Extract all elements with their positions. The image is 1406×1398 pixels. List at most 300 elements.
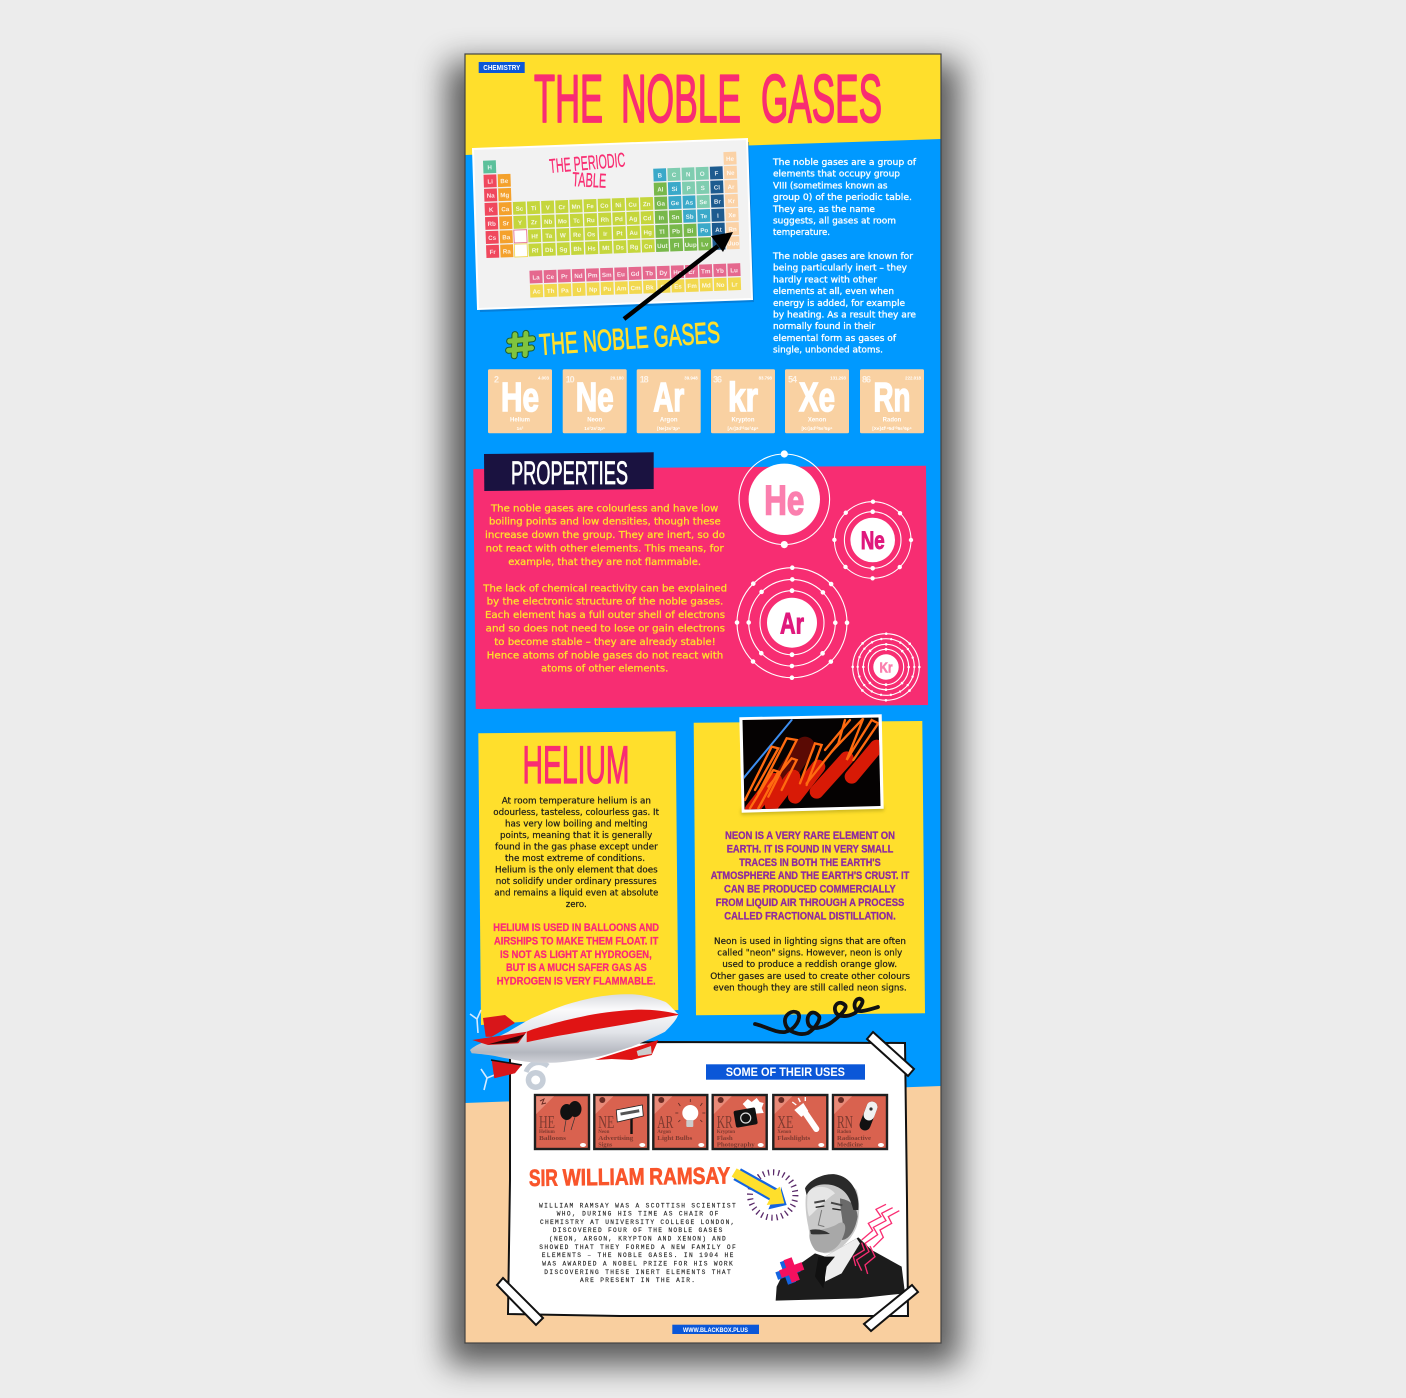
periodic table grid: Db [545, 247, 554, 254]
periodic table grid: He [726, 156, 735, 163]
panel: periodic table card [473, 139, 754, 312]
periodic table grid: Si [671, 186, 678, 193]
ramsay heading: RAMSAY [649, 1163, 731, 1189]
element: radon: Rn [874, 374, 910, 420]
periodic table grid: Nd [574, 273, 583, 280]
helium description [493, 796, 660, 910]
tape: top right [867, 1032, 914, 1076]
element: neon: 1s²2s²2p⁶ [584, 426, 605, 431]
periodic table grid: Co [600, 203, 609, 210]
periodic table grid: Ge [671, 200, 680, 207]
periodic table grid: Fm [687, 283, 697, 290]
periodic table grid: Se [699, 199, 708, 206]
helium uses callout: AIRSHIPS TO MAKE THEM FLOAT. IT [494, 935, 659, 947]
neon facts callout: EARTH. IT IS FOUND IN VERY SMALL [727, 843, 894, 855]
periodic table grid: Mt [602, 245, 610, 252]
periodic table grid: Ga [657, 200, 666, 208]
tile: argon light bulbs: AR [657, 1112, 673, 1132]
tile: helium balloons: Balloons [539, 1136, 567, 1142]
periodic table grid: Tb [645, 270, 653, 278]
ramsay biography: WILLIAM RAMSAY WAS A SCOTTISH SCIENTIST [539, 1202, 736, 1209]
periodic table grid: Ba [502, 234, 511, 242]
tile: radon radioactive medicine: Medicine [837, 1142, 863, 1148]
periodic table grid: Sn [671, 214, 680, 221]
periodic table grid: Tc [573, 218, 581, 225]
element: argon: 39.948 [684, 375, 698, 380]
neon description [710, 937, 910, 993]
periodic table grid [483, 152, 741, 299]
tile: helium balloons: Helium [539, 1130, 556, 1135]
properties text: The noble gases are colourless and have low [490, 503, 718, 514]
helium description: the most extreme of conditions. [505, 854, 645, 864]
tile: krypton flash photography: Photography [717, 1142, 755, 1148]
periodic table grid: Tl [659, 229, 665, 236]
periodic table grid: I [717, 213, 719, 220]
tape: bottom left [497, 1278, 543, 1325]
tile: neon signs: Signs [598, 1142, 613, 1148]
tile: radon radioactive medicine: Radioactive [837, 1136, 871, 1142]
periodic table grid: U [577, 287, 582, 294]
periodic table grid: Po [700, 227, 709, 234]
icon: sunburst with arrow [732, 1168, 795, 1218]
atom: helium [739, 450, 830, 548]
helium description: has very low boiling and melting [505, 819, 648, 829]
atom: neon: Ne [861, 527, 885, 555]
periodic table grid: S [701, 185, 705, 192]
intro text: hardly react with other [773, 275, 877, 285]
tile: argon light bulbs: Argon [657, 1130, 671, 1135]
element: helium: He [501, 374, 539, 420]
periodic table grid: Mg [500, 192, 510, 199]
periodic table grid: Te [700, 213, 708, 220]
periodic table grid: Be [500, 178, 509, 185]
periodic table grid: Uut [657, 243, 668, 250]
properties text: Each element has a full outer shell of electrons [485, 610, 725, 621]
periodic table grid: No [716, 282, 725, 289]
periodic table grid: Fr [489, 249, 496, 256]
periodic table heading [549, 149, 626, 193]
periodic table grid: Am [616, 285, 627, 293]
tile: xenon flashlights: XE [777, 1112, 793, 1132]
panel: helium [478, 731, 678, 1025]
periodic table grid: Dy [659, 270, 668, 277]
tile: xenon flashlights [773, 1095, 827, 1149]
intro text: VIII (sometimes known as [773, 181, 888, 191]
portrait: William Ramsay [776, 1174, 905, 1301]
periodic table grid: Hf [531, 233, 539, 241]
intro text: energy is added, for example [773, 299, 905, 309]
helium uses callout: HYDROGEN IS VERY FLAMMABLE. [497, 976, 656, 988]
periodic table grid: Cl [714, 184, 720, 192]
periodic table grid: Pt [616, 230, 623, 237]
ramsay biography: ARE PRESENT IN THE AIR. [580, 1277, 695, 1284]
element: radon: 86 [862, 374, 871, 384]
panel: neon [694, 714, 925, 1015]
periodic table grid: Cs [488, 235, 497, 242]
periodic table grid: Cm [630, 285, 641, 292]
helium description: and remains a liquid even at absolute [494, 888, 658, 898]
periodic table grid: Ne [726, 170, 735, 177]
element: krypton: Krypton [732, 417, 755, 423]
element: krypton: 83.798 [759, 375, 773, 380]
ramsay biography: ELEMENTS – THE NOBLE GASES. IN 1904 HE [542, 1252, 734, 1259]
neon description: called "neon" signs. However, neon is only [717, 949, 902, 959]
element cards [488, 369, 924, 433]
periodic table grid: Cr [558, 204, 566, 211]
helium heading: HELIUM [522, 736, 630, 795]
ramsay biography: WHO, DURING HIS TIME AS CHAIR OF [557, 1211, 719, 1218]
periodic table grid: Rn [728, 226, 737, 233]
periodic table heading: THE PERIODIC [549, 149, 626, 178]
properties heading: PROPERTIES [511, 455, 628, 491]
periodic table grid: Lu [730, 267, 738, 275]
element: argon [637, 369, 701, 433]
periodic table grid: W [560, 232, 566, 239]
neon facts callout: FROM LIQUID AIR THROUGH A PROCESS [716, 897, 904, 909]
periodic table grid: Br [714, 198, 722, 206]
intro text: normally found in their [773, 322, 875, 332]
periodic table grid: Th [547, 288, 555, 295]
tile: krypton flash photography [713, 1095, 767, 1149]
ramsay heading [529, 1163, 731, 1191]
properties text: and so does not need to lose or gain electrons [486, 624, 725, 634]
periodic table grid: Os [587, 231, 596, 239]
periodic table grid: Sr [502, 220, 510, 227]
title [534, 61, 882, 137]
tile: neon signs: Advertising [598, 1136, 633, 1142]
ramsay biography: WAS AWARDED A NOBEL PRIZE FOR HIS WORK [542, 1260, 733, 1268]
atom: helium: He [764, 476, 804, 524]
atom: krypton [853, 634, 919, 700]
tile: argon light bulbs [653, 1095, 707, 1149]
periodic table grid: Md [702, 282, 711, 290]
icon: pink cross [773, 1255, 807, 1287]
periodic table grid: Ra [503, 248, 511, 256]
atom: argon: Ar [780, 608, 804, 640]
helium uses callout: BUT IS A MUCH SAFER GAS AS [506, 962, 647, 974]
element: neon: Neon [587, 417, 603, 423]
periodic table grid: Au [629, 230, 638, 237]
periodic table grid: Cd [643, 215, 652, 222]
footer url: WWW.BLACKBOX.PLUS [683, 1328, 748, 1334]
element: helium: Helium [510, 417, 530, 423]
periodic table grid: Es [674, 283, 682, 291]
element: argon: Ar [653, 374, 684, 420]
periodic table grid: Lr [731, 281, 738, 289]
icon: green hash [507, 333, 534, 356]
periodic table grid: Lv [701, 241, 709, 249]
periodic table grid: Eu [617, 271, 625, 279]
properties text: boiling points and low densities, though these [489, 517, 721, 528]
ramsay heading: SIR [529, 1165, 558, 1191]
intro text [772, 158, 917, 356]
element: xenon: 54 [788, 374, 797, 384]
helium description: found in the gas phase except under [495, 842, 658, 852]
atom: krypton: Kr [880, 660, 893, 676]
element: krypton: 36 [713, 374, 722, 384]
periodic table grid: Bi [687, 228, 694, 235]
element: helium: 2 [494, 374, 499, 384]
periodic table grid: Pm [588, 272, 598, 280]
ramsay biography: (NEON, ARGON, KRYPTON AND XENON) AND [549, 1236, 726, 1243]
periodic table grid: Pu [603, 286, 612, 293]
uses heading [706, 1064, 865, 1080]
element: xenon: 131.293 [830, 375, 847, 380]
helium uses callout: IS NOT AS LIGHT AT HYDROGEN, [500, 949, 652, 961]
periodic table grid: Sm [602, 272, 612, 279]
tile: radon radioactive medicine [833, 1095, 887, 1149]
intro text: by heating. As a result they are [773, 310, 916, 320]
periodic table grid: Sb [686, 214, 694, 221]
title: GASES [761, 61, 882, 137]
ramsay biography [539, 1202, 736, 1284]
footer url [672, 1325, 759, 1334]
periodic table grid: O [700, 171, 705, 178]
periodic table grid: Mn [571, 204, 581, 211]
tile: argon light bulbs: Light Bulbs [657, 1136, 693, 1142]
poster background [465, 54, 941, 1343]
ramsay biography: DISCOVERING THESE INERT ELEMENTS THAT [544, 1269, 731, 1276]
intro text: elements that occupy group [773, 170, 900, 180]
title: NOBLE [621, 61, 741, 137]
intro text: group 0) of the periodic table. [773, 193, 912, 203]
properties text: not react with other elements. This means, for [486, 544, 725, 554]
helium description: odourless, tasteless, colourless gas. It [493, 808, 660, 818]
periodic table grid: Cu [628, 202, 637, 209]
periodic table grid: Sc [516, 206, 524, 213]
periodic table grid: K [489, 207, 494, 214]
periodic table grid: P [686, 185, 691, 193]
element: radon: Radon [883, 417, 902, 423]
tile: krypton flash photography: KR [717, 1112, 733, 1132]
periodic table grid: Rh [601, 217, 609, 224]
properties text: Hence atoms of noble gases do not react with [487, 650, 723, 661]
periodic table grid: Zn [643, 201, 651, 208]
periodic table grid: Bk [646, 284, 654, 292]
periodic table grid: Uuo [727, 240, 739, 248]
element: argon: 18 [640, 374, 649, 384]
category tag: CHEMISTRY [483, 65, 521, 72]
ramsay biography: SHOWED THAT THEY FORMED A NEW FAMILY OF [539, 1244, 736, 1251]
atom: neon [834, 502, 911, 578]
tile: neon signs [594, 1095, 648, 1149]
periodic table grid: Pr [561, 273, 568, 281]
periodic table grid: Np [589, 286, 598, 294]
tile: krypton flash photography: Flash [717, 1136, 733, 1142]
element: xenon: Xenon [808, 417, 826, 423]
tile: radon radioactive medicine: RN [837, 1112, 853, 1132]
periodic table grid: H [487, 164, 493, 172]
intro text: The noble gases are known for [772, 252, 913, 262]
tile: radon radioactive medicine: Radon [837, 1130, 851, 1135]
periodic table grid: Fl [674, 242, 680, 250]
periodic table grid: Kr [728, 198, 736, 205]
element: neon: 20.180 [610, 375, 624, 380]
properties text: increase down the group. They are inert, so do [485, 530, 725, 541]
periodic table grid: At [715, 227, 722, 234]
squiggle [755, 999, 878, 1034]
periodic table grid: Ir [603, 231, 608, 238]
element: neon: 10 [566, 374, 575, 384]
infographic page [423, 38, 983, 1389]
helium uses callout [493, 922, 659, 988]
intro text: They are, as the name [772, 205, 875, 215]
neon description: even though they are still called neon signs. [713, 983, 907, 993]
title: THE [534, 61, 603, 137]
element: helium: 1s² [517, 426, 524, 431]
periodic table grid: Hs [588, 245, 596, 253]
periodic table heading: TABLE [572, 169, 607, 193]
intro text: elements at all, even when [773, 287, 894, 297]
periodic table grid: Li [487, 178, 493, 186]
element: helium: 4.003 [538, 375, 550, 380]
icon: pink zigzags [853, 1204, 899, 1274]
tile: helium balloons: HE [539, 1112, 555, 1132]
element: argon: Argon [660, 417, 678, 423]
illustration: airship [470, 994, 678, 1090]
periodic table grid: Rb [487, 221, 496, 228]
periodic table grid: Gd [631, 271, 640, 278]
helium description: not solidify under ordinary pressures [496, 877, 657, 887]
element: argon: [Ne]3s²3p⁶ [657, 426, 680, 431]
intro text: single, unbonded atoms. [773, 346, 883, 356]
panel: uses and biography card [497, 1032, 918, 1331]
element: helium [488, 369, 552, 433]
tile: xenon flashlights: Xenon [777, 1130, 791, 1135]
periodic table grid: Er [688, 269, 696, 276]
periodic table grid: V [546, 205, 551, 212]
helium description: Helium is the only element that does [495, 865, 658, 875]
periodic table grid: Ar [728, 184, 735, 191]
periodic table grid: Rf [532, 247, 539, 255]
neon description: used to produce a reddish orange glow. [722, 960, 897, 970]
ramsay biography: DISCOVERED FOUR OF THE NOBLE GASES [553, 1227, 723, 1234]
uses heading: SOME OF THEIR USES [726, 1067, 845, 1079]
neon facts callout: NEON IS A VERY RARE ELEMENT ON [725, 830, 895, 842]
neon facts callout [711, 830, 910, 922]
periodic table grid: La [532, 274, 540, 282]
periodic table grid: Fe [586, 203, 594, 210]
periodic table grid: F [714, 170, 719, 178]
helium description: zero. [566, 900, 587, 910]
tile: xenon flashlights: Flashlights [777, 1136, 811, 1142]
intro text: being particularly inert – they [773, 264, 908, 274]
periodic table grid: C [672, 172, 677, 179]
tile: neon signs: NE [598, 1112, 614, 1132]
neon photograph [739, 714, 884, 815]
periodic table grid: Na [487, 192, 495, 200]
helium description: points, meaning that it is generally [500, 831, 652, 841]
atom: argon [737, 568, 847, 678]
element: xenon: Xe [799, 374, 835, 420]
periodic table grid: Ti [531, 205, 537, 212]
arrow to noble gases [624, 232, 733, 319]
properties text [482, 503, 727, 675]
periodic table grid: Mo [558, 218, 567, 225]
ramsay heading: WILLIAM [562, 1163, 645, 1190]
periodic table grid: Bh [573, 246, 582, 253]
periodic table grid: Y [518, 220, 523, 227]
periodic table grid: In [658, 215, 664, 222]
periodic table grid: Xe [728, 212, 737, 219]
periodic table grid: Zr [531, 219, 538, 226]
periodic table grid: Ds [616, 244, 625, 252]
periodic table grid: Ce [546, 274, 555, 281]
panel: properties [473, 450, 928, 709]
poster outline [465, 54, 941, 1343]
element: radon [860, 369, 924, 433]
intro text: The noble gases are a group of [772, 158, 917, 168]
periodic table grid: Ho [673, 269, 682, 277]
periodic table grid: Uup [685, 242, 697, 249]
properties text: to become stable – they are already stable! [494, 637, 716, 648]
properties text: example, that they are not flammable. [508, 557, 701, 568]
tile: helium balloons [535, 1095, 589, 1149]
periodic table grid: Ag [629, 216, 638, 223]
properties text: atoms of other elements. [541, 664, 668, 675]
periodic table grid: Tm [701, 268, 711, 276]
noble gases subheading: THE NOBLE GASES [538, 316, 721, 362]
periodic table grid: Ca [501, 206, 510, 213]
category tag [479, 62, 525, 73]
periodic table grid: Nb [544, 219, 553, 226]
helium uses callout: HELIUM IS USED IN BALLOONS AND [493, 922, 659, 934]
periodic table grid: Ac [532, 288, 541, 296]
element: krypton: [Ar]3d¹⁰4s²4p⁶ [727, 426, 759, 431]
neon facts callout: CALLED FRACTIONAL DISTILLATION. [724, 910, 896, 922]
element: xenon [785, 369, 849, 433]
element: radon: [Xe]4f¹⁴5d¹⁰6s²6p⁶ [872, 426, 912, 431]
use tiles [535, 1095, 887, 1149]
periodic table grid: Ni [615, 202, 622, 209]
periodic table grid: As [685, 199, 694, 207]
periodic table grid: Re [573, 232, 582, 239]
intro text: elemental form as gases of [773, 334, 897, 344]
periodic table grid: Cn [644, 243, 653, 251]
periodic table grid: Ta [545, 233, 553, 240]
periodic table grid: Yb [716, 268, 724, 275]
tile: neon signs: Neon [598, 1130, 610, 1135]
properties text: by the electronic structure of the noble gases. [487, 597, 723, 608]
tape: bottom right [864, 1285, 918, 1331]
periodic table grid: Pb [672, 228, 680, 235]
neon facts callout: ATMOSPHERE AND THE EARTH'S CRUST. IT [711, 870, 910, 882]
element: neon [563, 369, 627, 433]
intro text: suggests, all gases at room [773, 216, 896, 226]
ramsay biography: CHEMISTRY AT UNIVERSITY COLLEGE LONDON, [540, 1219, 734, 1226]
properties text: The lack of chemical reactivity can be explained [482, 583, 727, 594]
neon facts callout: CAN BE PRODUCED COMMERCIALLY [724, 884, 896, 896]
periodic table grid: Rg [630, 244, 639, 251]
periodic table grid: Ru [586, 217, 595, 224]
element: xenon: [Kr]4d¹⁰5s²5p⁶ [801, 426, 833, 431]
periodic table grid: Hg [643, 229, 652, 236]
periodic table grid: Pd [615, 216, 623, 223]
periodic table grid: Pa [561, 287, 569, 295]
periodic table grid: Al [657, 186, 664, 194]
periodic table grid: Cf [660, 284, 668, 291]
element: neon: Ne [576, 374, 614, 420]
periodic table grid: N [686, 171, 691, 179]
drop shadow [447, 62, 959, 1365]
neon description: Neon is used in lighting signs that are often [714, 937, 906, 947]
periodic table grid: Sg [559, 246, 568, 254]
element: krypton [711, 369, 775, 433]
tile: krypton flash photography: Krypton [717, 1130, 735, 1135]
intro text: temperature. [773, 228, 830, 238]
helium description: At room temperature helium is an [502, 796, 651, 806]
neon facts callout: TRACES IN BOTH THE EARTH'S [739, 857, 881, 869]
